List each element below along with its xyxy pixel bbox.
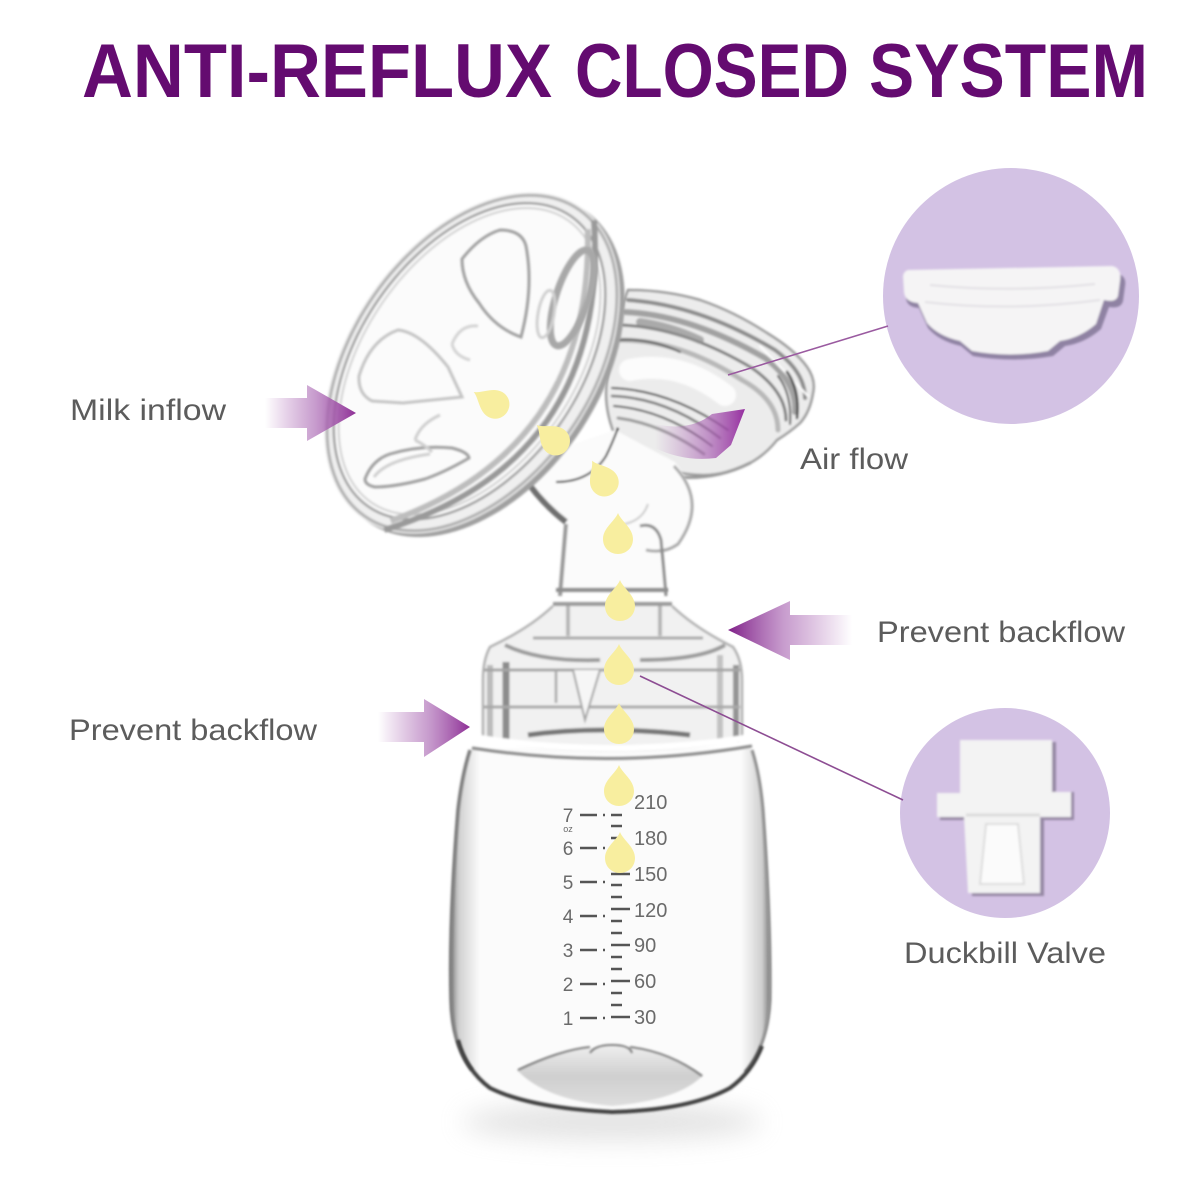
scale labels: millilitres: 120	[634, 900, 667, 922]
leader line: diaphragm	[728, 326, 888, 375]
flange rims	[263, 137, 686, 592]
bottle base dome rim	[518, 1045, 702, 1076]
scale labels: ounces: 6	[563, 839, 573, 860]
bottle	[451, 590, 770, 1140]
title: ANTI-REFLUX	[82, 29, 552, 114]
elbow connector	[522, 428, 692, 596]
scale labels: millilitres: 180	[634, 828, 667, 850]
bottle body	[451, 748, 770, 1112]
bottle outline right	[745, 750, 770, 1072]
back cup	[606, 290, 814, 478]
scale labels: ounces: 4	[563, 907, 574, 928]
title: SYSTEM	[869, 29, 1148, 114]
panel: silicone diaphragm circle	[883, 168, 1139, 424]
scale labels: ounces: 2	[563, 975, 573, 996]
scale labels: millilitres: 60	[634, 971, 656, 993]
title: CLOSED	[575, 29, 849, 114]
label: milk inflow: Milk inflow	[70, 394, 226, 427]
milk drops	[467, 380, 635, 873]
breast flange	[263, 137, 686, 592]
collar	[472, 590, 752, 759]
arrow: milk inflow	[265, 385, 356, 441]
bottle soft shadow	[462, 1104, 762, 1140]
cup thread streaks	[612, 300, 808, 478]
scale labels: ounces: oz	[563, 824, 573, 834]
bottle base dome	[517, 1047, 703, 1106]
scale labels: millilitres	[634, 792, 667, 1029]
scale labels: ounces: 3	[563, 941, 573, 962]
scale labels: millilitres: 30	[634, 1007, 656, 1029]
panel: duckbill valve circle	[900, 708, 1110, 918]
flange petals	[359, 230, 603, 487]
icon: duckbill valve	[937, 740, 1074, 896]
scale labels: ounces	[563, 806, 574, 1030]
leader line: duckbill valve	[640, 676, 903, 800]
label: duckbill valve: Duckbill Valve	[904, 937, 1106, 970]
scale labels: ounces: 7	[563, 806, 573, 827]
arrow: prevent backflow right	[728, 601, 852, 660]
scale labels: ounces: 5	[563, 873, 573, 894]
bottle scale: ounces and millilitres	[563, 792, 667, 1030]
scale labels: millilitres: 210	[634, 792, 667, 814]
label: air flow: Air flow	[800, 443, 908, 476]
bottle base rim	[458, 1040, 762, 1112]
label: prevent backflow left: Prevent backflow	[69, 714, 317, 747]
arrow: prevent backflow left	[378, 699, 470, 757]
icon: silicone diaphragm cup	[903, 266, 1125, 360]
label: prevent backflow right: Prevent backflow	[877, 616, 1125, 649]
scale labels: millilitres: 150	[634, 864, 667, 886]
bottle outline	[451, 750, 472, 1070]
scale labels: ounces: 1	[563, 1009, 573, 1030]
arrow: air flow	[655, 409, 745, 459]
scale tick marks	[580, 815, 630, 1018]
scale labels: millilitres: 90	[634, 935, 656, 957]
